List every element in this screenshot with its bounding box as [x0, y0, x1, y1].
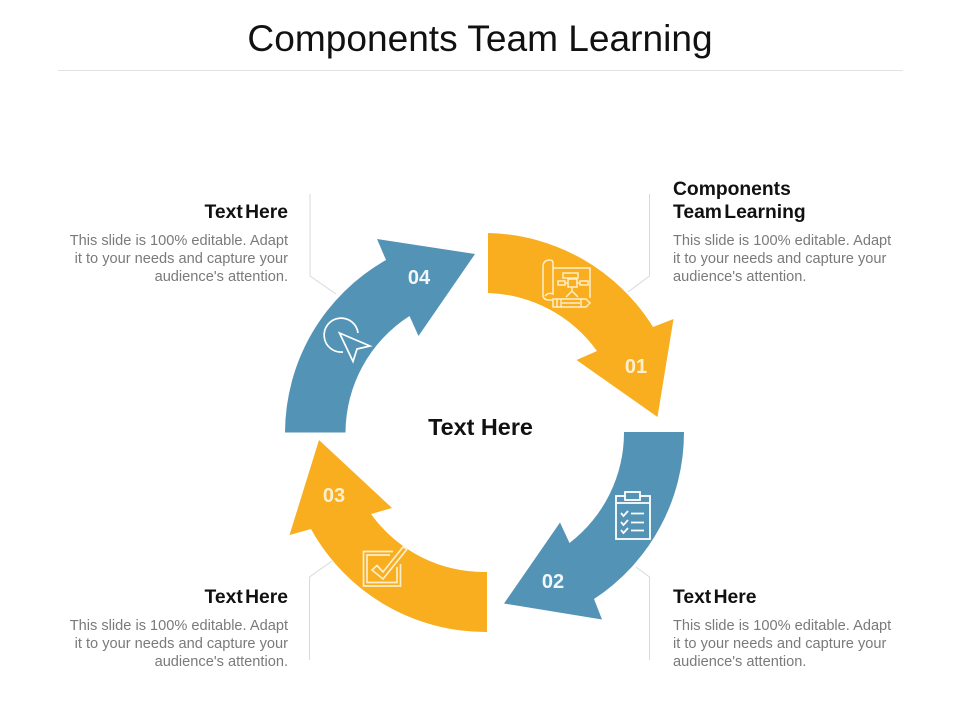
icon: checklist	[616, 492, 650, 539]
text block: top left: Text Here	[205, 202, 288, 223]
text block: top left: This slide is 100% editable. Adapt	[70, 233, 288, 249]
text block: top right: This slide is 100% editable. Adapt	[673, 233, 891, 249]
text block: top right: it to your needs and capture your	[673, 251, 886, 267]
icon: blueprint	[543, 260, 590, 307]
text block: bottom right: it to your needs and capture your	[673, 636, 886, 652]
label 04: 04	[408, 267, 431, 289]
text block: top right	[673, 179, 892, 285]
arrow 03	[290, 440, 487, 632]
icon: checkbox	[364, 547, 407, 586]
text block: top right: audience's attention.	[673, 269, 806, 285]
arrow 01	[488, 233, 674, 417]
text block: top left	[70, 202, 288, 285]
label 02: 02	[542, 571, 564, 593]
center label: Text Here	[428, 414, 533, 440]
text block: bottom left	[70, 587, 288, 670]
text block: bottom right: audience's attention.	[673, 654, 806, 670]
text block: bottom left: audience's attention.	[155, 654, 288, 670]
text block: top right: Components	[673, 179, 791, 200]
text block: bottom right	[673, 587, 892, 670]
text block: bottom left: Text Here	[205, 587, 288, 608]
label 01: 01	[625, 356, 647, 378]
text block: top left: audience's attention.	[155, 269, 288, 285]
text block: top left: it to your needs and capture your	[75, 251, 288, 267]
arrow 02	[504, 432, 684, 620]
icon: cursor	[324, 318, 370, 362]
text block: bottom right: This slide is 100% editable. Adapt	[673, 618, 891, 634]
text block: bottom right: Text Here	[673, 587, 756, 608]
text block: bottom left: it to your needs and capture your	[75, 636, 288, 652]
label 03: 03	[323, 485, 345, 507]
text block: bottom left: This slide is 100% editable. Adapt	[70, 618, 288, 634]
title: Components Team Learning	[247, 17, 713, 59]
text block: top right: Team Learning	[673, 202, 806, 223]
arrow 04	[285, 239, 475, 432]
